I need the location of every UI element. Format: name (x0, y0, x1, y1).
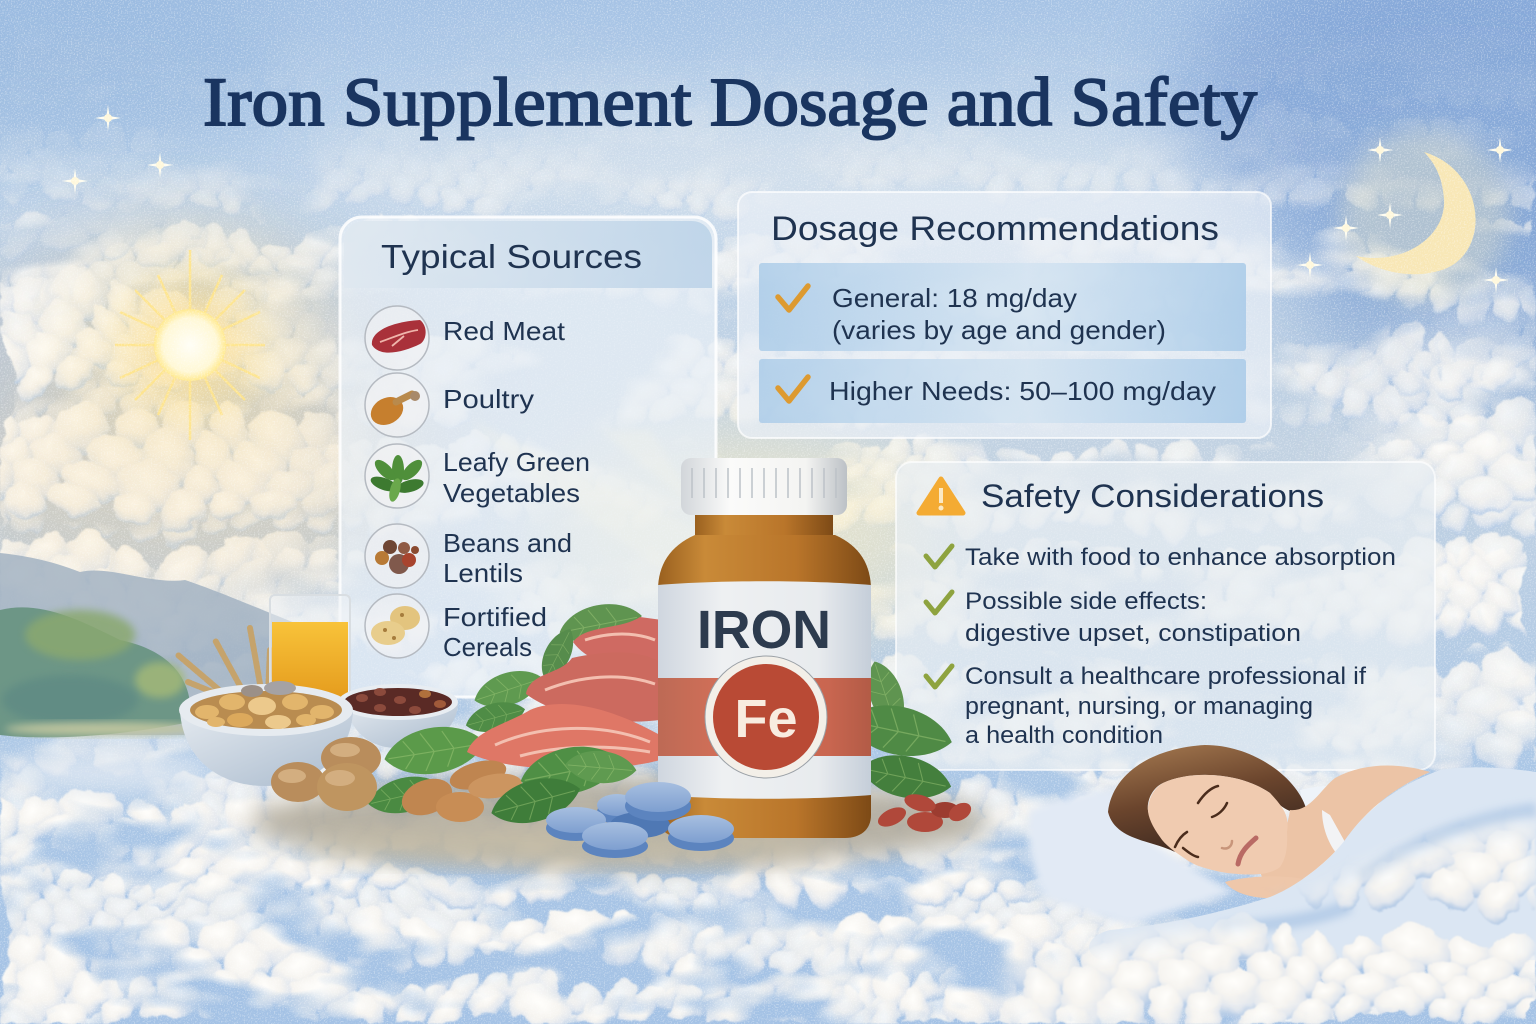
icon: poultry (365, 373, 429, 437)
title: Iron Supplement Dosage and Safety (203, 64, 1258, 140)
raw meat slices (467, 617, 662, 769)
label: poultry: Poultry (443, 384, 534, 414)
safety item: side effects: Possible side effects: (965, 588, 1207, 615)
icon: leafy greens (365, 444, 429, 508)
panel: safety considerations (896, 462, 1435, 770)
row: higher needs (759, 359, 1246, 423)
closed eyes and brows (1175, 786, 1227, 857)
row: general dose (759, 263, 1246, 351)
label: beans and lentils: Lentils (443, 558, 523, 588)
stars (62, 105, 1513, 293)
red beans (875, 791, 974, 832)
row: higher needs: Higher Needs: 50–100 mg/day (829, 376, 1216, 406)
pillow (1028, 790, 1235, 925)
label: fortified cereals: Fortified (443, 602, 547, 632)
face (1148, 775, 1288, 875)
label: fortified cereals (443, 602, 547, 662)
side cumulus banks (0, 210, 1536, 766)
safety item: consult a professional (926, 663, 1366, 749)
sun (100, 250, 280, 440)
label text: iron: IRON (697, 600, 831, 660)
bowl of nuts (179, 681, 353, 786)
heading: safety considerations: Safety Considerations (981, 478, 1324, 514)
cumulus over blanket (996, 816, 1536, 1024)
spinach leaves right (841, 657, 957, 809)
icon: warning triangle (919, 479, 963, 513)
juice glass (270, 595, 350, 703)
panel: typical sources (340, 217, 716, 697)
label: leafy green vegetables: Leafy Green (443, 447, 590, 477)
label: red meat: Red Meat (443, 316, 566, 346)
lower cumulus clouds (0, 720, 1536, 1024)
shoulder and neck (1260, 766, 1430, 897)
safety item: consult a professional: a health condition (965, 722, 1163, 749)
blue iron tablets (546, 782, 734, 858)
label: fortified cereals: Cereals (443, 632, 532, 662)
heading: typical sources: Typical Sources (381, 238, 642, 275)
safety item: take with food: Take with food to enhance absorption (965, 544, 1396, 571)
row: general dose: (varies by age and gender) (832, 315, 1166, 345)
blanket (1089, 767, 1536, 960)
bottle label (658, 581, 871, 799)
label red band (658, 678, 871, 756)
safety item: side effects (926, 588, 1301, 647)
small bowl of beans (338, 684, 458, 748)
wheat stalks (178, 628, 270, 700)
bottle body (658, 535, 871, 838)
top strap (1322, 810, 1345, 853)
bottle cap (681, 458, 847, 515)
panel: dosage recommendations (738, 192, 1271, 438)
spinach leaves front (486, 741, 638, 830)
fe emblem (705, 656, 827, 778)
icon: fortified cereals (365, 594, 429, 658)
ground beneath food (250, 776, 990, 868)
label: beans and lentils (443, 528, 572, 588)
fe emblem: Fe (734, 689, 798, 749)
icon: red meat (365, 306, 429, 370)
safety item: side effects: digestive upset, constipation (965, 620, 1301, 647)
safety item: consult a professional: pregnant, nursing, or managing (965, 693, 1313, 720)
hair (1108, 745, 1307, 852)
header band (344, 221, 712, 288)
moon (1340, 130, 1510, 300)
spinach leaves left (365, 599, 645, 818)
bottle neck (695, 505, 833, 555)
blanket folds (1220, 810, 1536, 930)
pillow behind neck (1300, 786, 1340, 830)
sky tint patches (0, 0, 1536, 610)
whole nuts (271, 737, 523, 822)
safety item: consult a professional: Consult a healthcare professional if (965, 663, 1366, 690)
row: general dose: General: 18 mg/day (832, 283, 1077, 313)
heading: dosage recommendations: Dosage Recommendations (771, 210, 1219, 248)
iron supplement bottle (658, 458, 871, 838)
label: beans and lentils: Beans and (443, 528, 572, 558)
icon: beans and lentils (365, 524, 429, 588)
label: leafy green vegetables: Vegetables (443, 478, 580, 508)
clouds lapping the hills (5, 750, 215, 794)
distant mountains and hills (0, 553, 300, 737)
nose and lips (1222, 838, 1256, 864)
light rays behind the bottle (470, 420, 950, 650)
sleeping woman in clouds (1028, 745, 1536, 960)
hand (1225, 876, 1307, 898)
label: leafy green vegetables (443, 447, 590, 508)
warm light on left clouds (0, 235, 420, 590)
